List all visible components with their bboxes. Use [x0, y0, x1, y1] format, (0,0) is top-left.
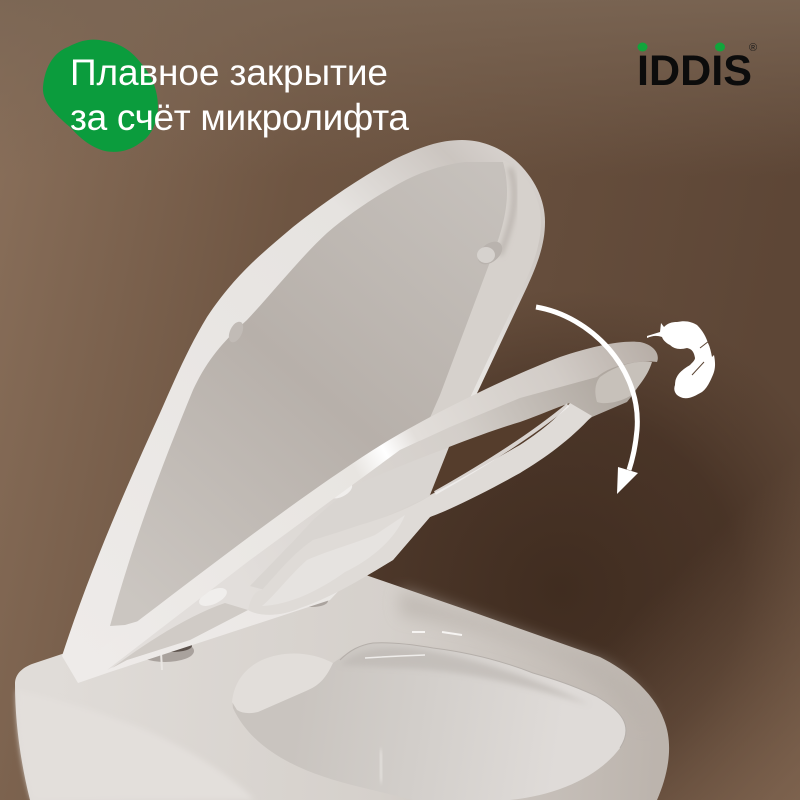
lid bumper left	[226, 319, 246, 345]
bowl opening	[233, 643, 626, 800]
seat underside ring	[107, 360, 650, 670]
bowl light streak	[380, 750, 382, 782]
lower ring arm	[248, 403, 592, 615]
bowl back shade	[340, 648, 590, 705]
toilet bowl	[15, 572, 669, 800]
lid wall crease	[500, 168, 515, 255]
raised lid	[62, 140, 545, 683]
rim back shadow	[400, 590, 655, 725]
logo dot two	[715, 42, 725, 52]
title line one: Плавное закрытие	[70, 52, 388, 93]
underside base	[107, 360, 650, 670]
seat top strip	[97, 342, 658, 670]
gap showing wall	[430, 403, 570, 495]
green blob	[43, 40, 158, 152]
bowl opening rim line	[340, 643, 626, 748]
lid outer rim	[62, 140, 545, 683]
hood highlight	[365, 655, 425, 658]
title	[70, 52, 409, 138]
rim highlights	[412, 632, 462, 635]
flush hood	[232, 654, 333, 713]
arrow: closing direction	[536, 307, 638, 494]
icon: feather	[647, 321, 715, 398]
title line two: за счёт микролифта	[70, 97, 409, 138]
hinge cover	[112, 603, 248, 668]
arm highlight	[435, 405, 568, 493]
hinge: chrome base	[136, 640, 194, 670]
seat buffer low	[196, 584, 230, 610]
ring inner face	[262, 515, 405, 606]
hinge: right base	[296, 595, 328, 607]
seat buffer mid	[325, 478, 355, 502]
seen-through lid area	[250, 447, 450, 590]
lid right wall	[330, 160, 541, 560]
logo	[637, 42, 757, 95]
lid inner panel	[110, 162, 507, 626]
logo wordmark: IDDIS	[637, 47, 752, 95]
registered mark: ®	[749, 42, 757, 54]
seat hinge end	[595, 362, 652, 403]
lid bumper top	[473, 237, 507, 269]
logo dot one	[638, 42, 648, 52]
ceramic body	[15, 572, 669, 800]
front face shading	[17, 690, 255, 800]
